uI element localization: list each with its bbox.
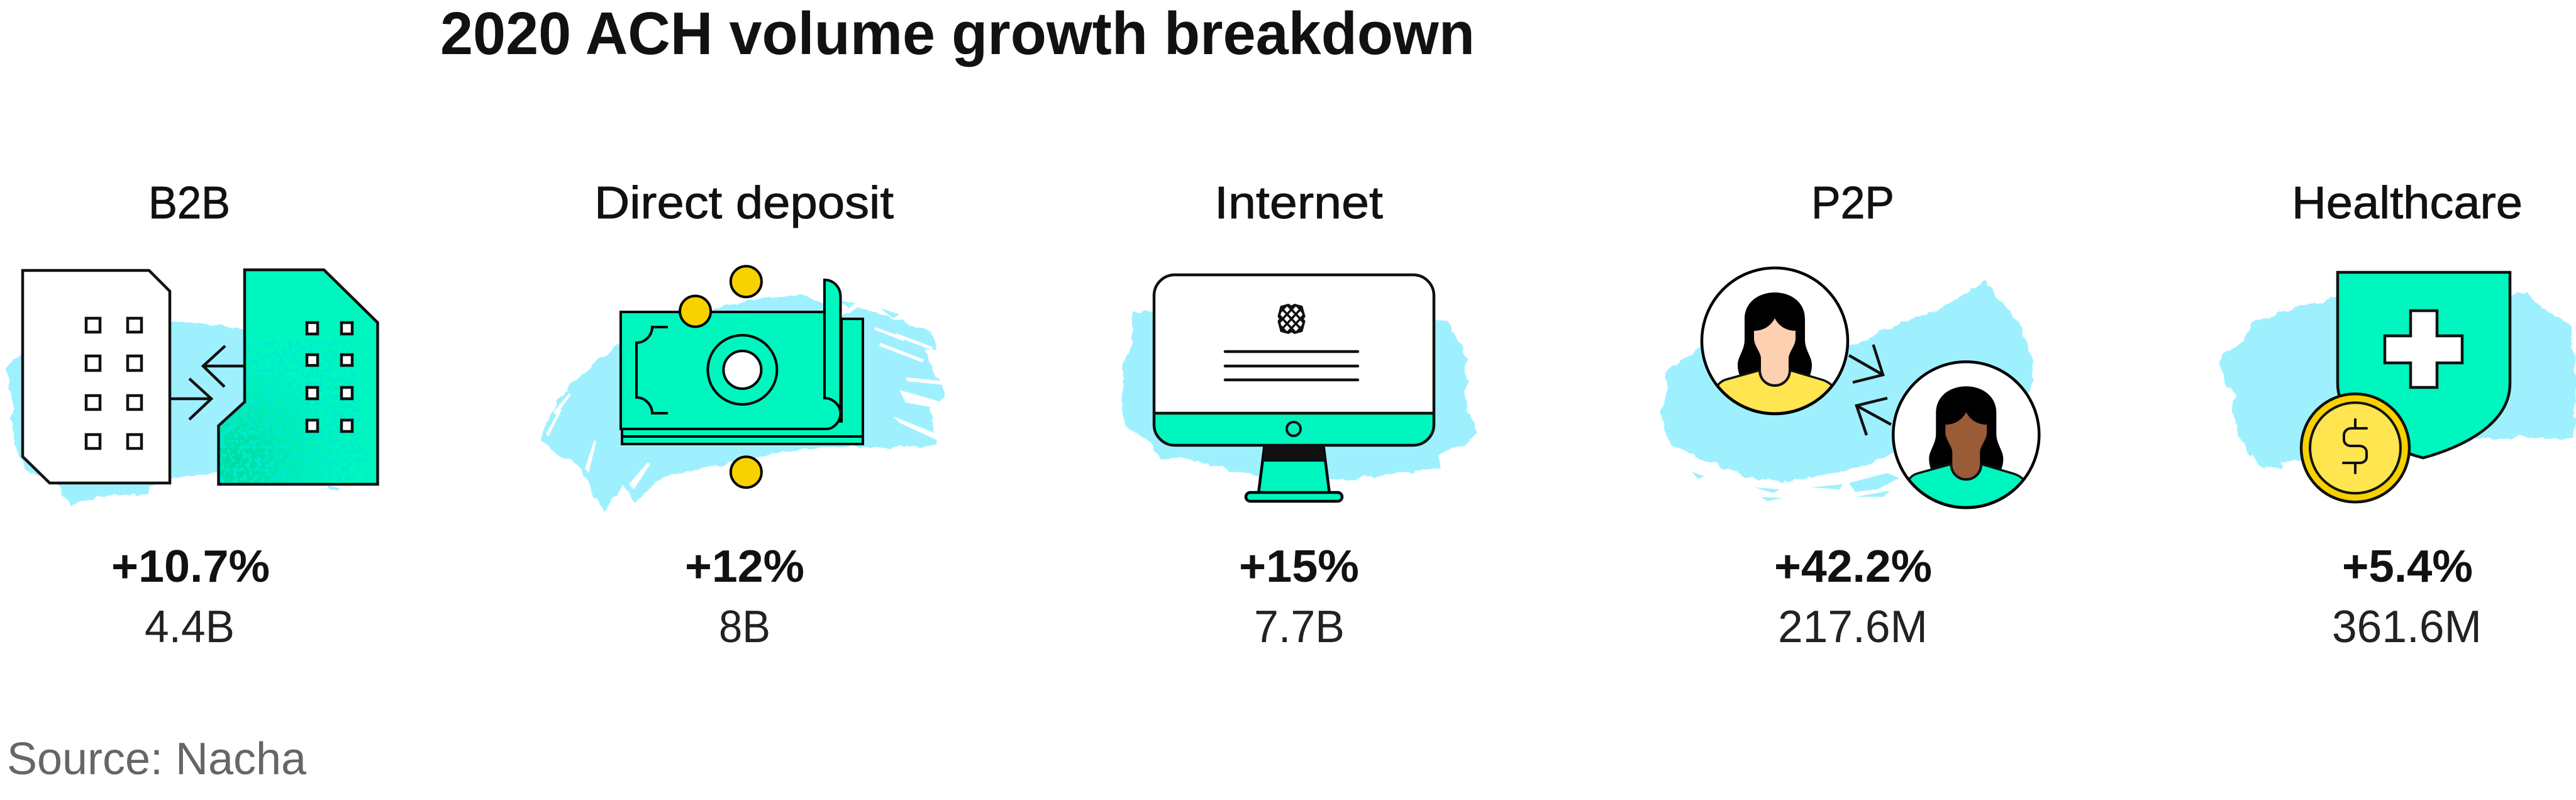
- icon: stack of banknotes: [621, 280, 864, 444]
- arrow: right to left: [203, 346, 245, 387]
- volume: P2P: 217.6M: [1778, 602, 1928, 652]
- heading: Direct deposit: Direct deposit: [594, 178, 894, 228]
- icon: green office building: [219, 270, 377, 484]
- heading: Healthcare: Healthcare: [2292, 178, 2523, 228]
- growth: Healthcare: +5.4%: [2342, 542, 2473, 592]
- panel: P2P: [1661, 178, 2039, 652]
- brush stroke background: P2P: [1661, 281, 2034, 501]
- growth: Internet: +15%: [1239, 542, 1359, 592]
- volume: Internet: 7.7B: [1254, 602, 1345, 652]
- arrow: person two to person one: [1857, 398, 1891, 435]
- brush stroke background: Healthcare: [2219, 292, 2575, 469]
- volume: B2B: 4.4B: [145, 602, 235, 652]
- heading: Internet: Internet: [1214, 178, 1383, 228]
- arrow: person one to person two: [1849, 345, 1883, 382]
- icon: desktop monitor: [1154, 275, 1434, 501]
- icon: medical shield: [2338, 272, 2510, 458]
- brush stroke background: Direct deposit: [541, 297, 945, 509]
- growth: P2P: +42.2%: [1774, 542, 1932, 592]
- growth: Direct deposit: +12%: [685, 542, 804, 592]
- icon: coins: [680, 266, 762, 487]
- panel: Direct deposit: [541, 178, 945, 652]
- source note: Source: Nacha: [7, 734, 307, 784]
- title: 2020 ACH volume growth breakdown: [440, 0, 1475, 67]
- brush stroke background: B2B: [6, 321, 340, 505]
- panel: Internet: [1123, 178, 1476, 652]
- panel: Healthcare: [2219, 178, 2575, 652]
- icon: white office building: [23, 270, 170, 483]
- icon: person one: [1702, 268, 1848, 414]
- icon: person two: [1893, 362, 2039, 508]
- arrow: left to right: [170, 379, 211, 419]
- heading: P2P: P2P: [1811, 178, 1894, 228]
- volume: Direct deposit: 8B: [719, 602, 770, 652]
- growth: B2B: +10.7%: [111, 542, 270, 592]
- brush stroke background: Internet: [1123, 311, 1476, 480]
- volume: Healthcare: 361.6M: [2332, 602, 2482, 652]
- heading: B2B: B2B: [148, 178, 230, 228]
- icon: dollar coin: [2301, 394, 2409, 502]
- panel: B2B: [6, 178, 377, 652]
